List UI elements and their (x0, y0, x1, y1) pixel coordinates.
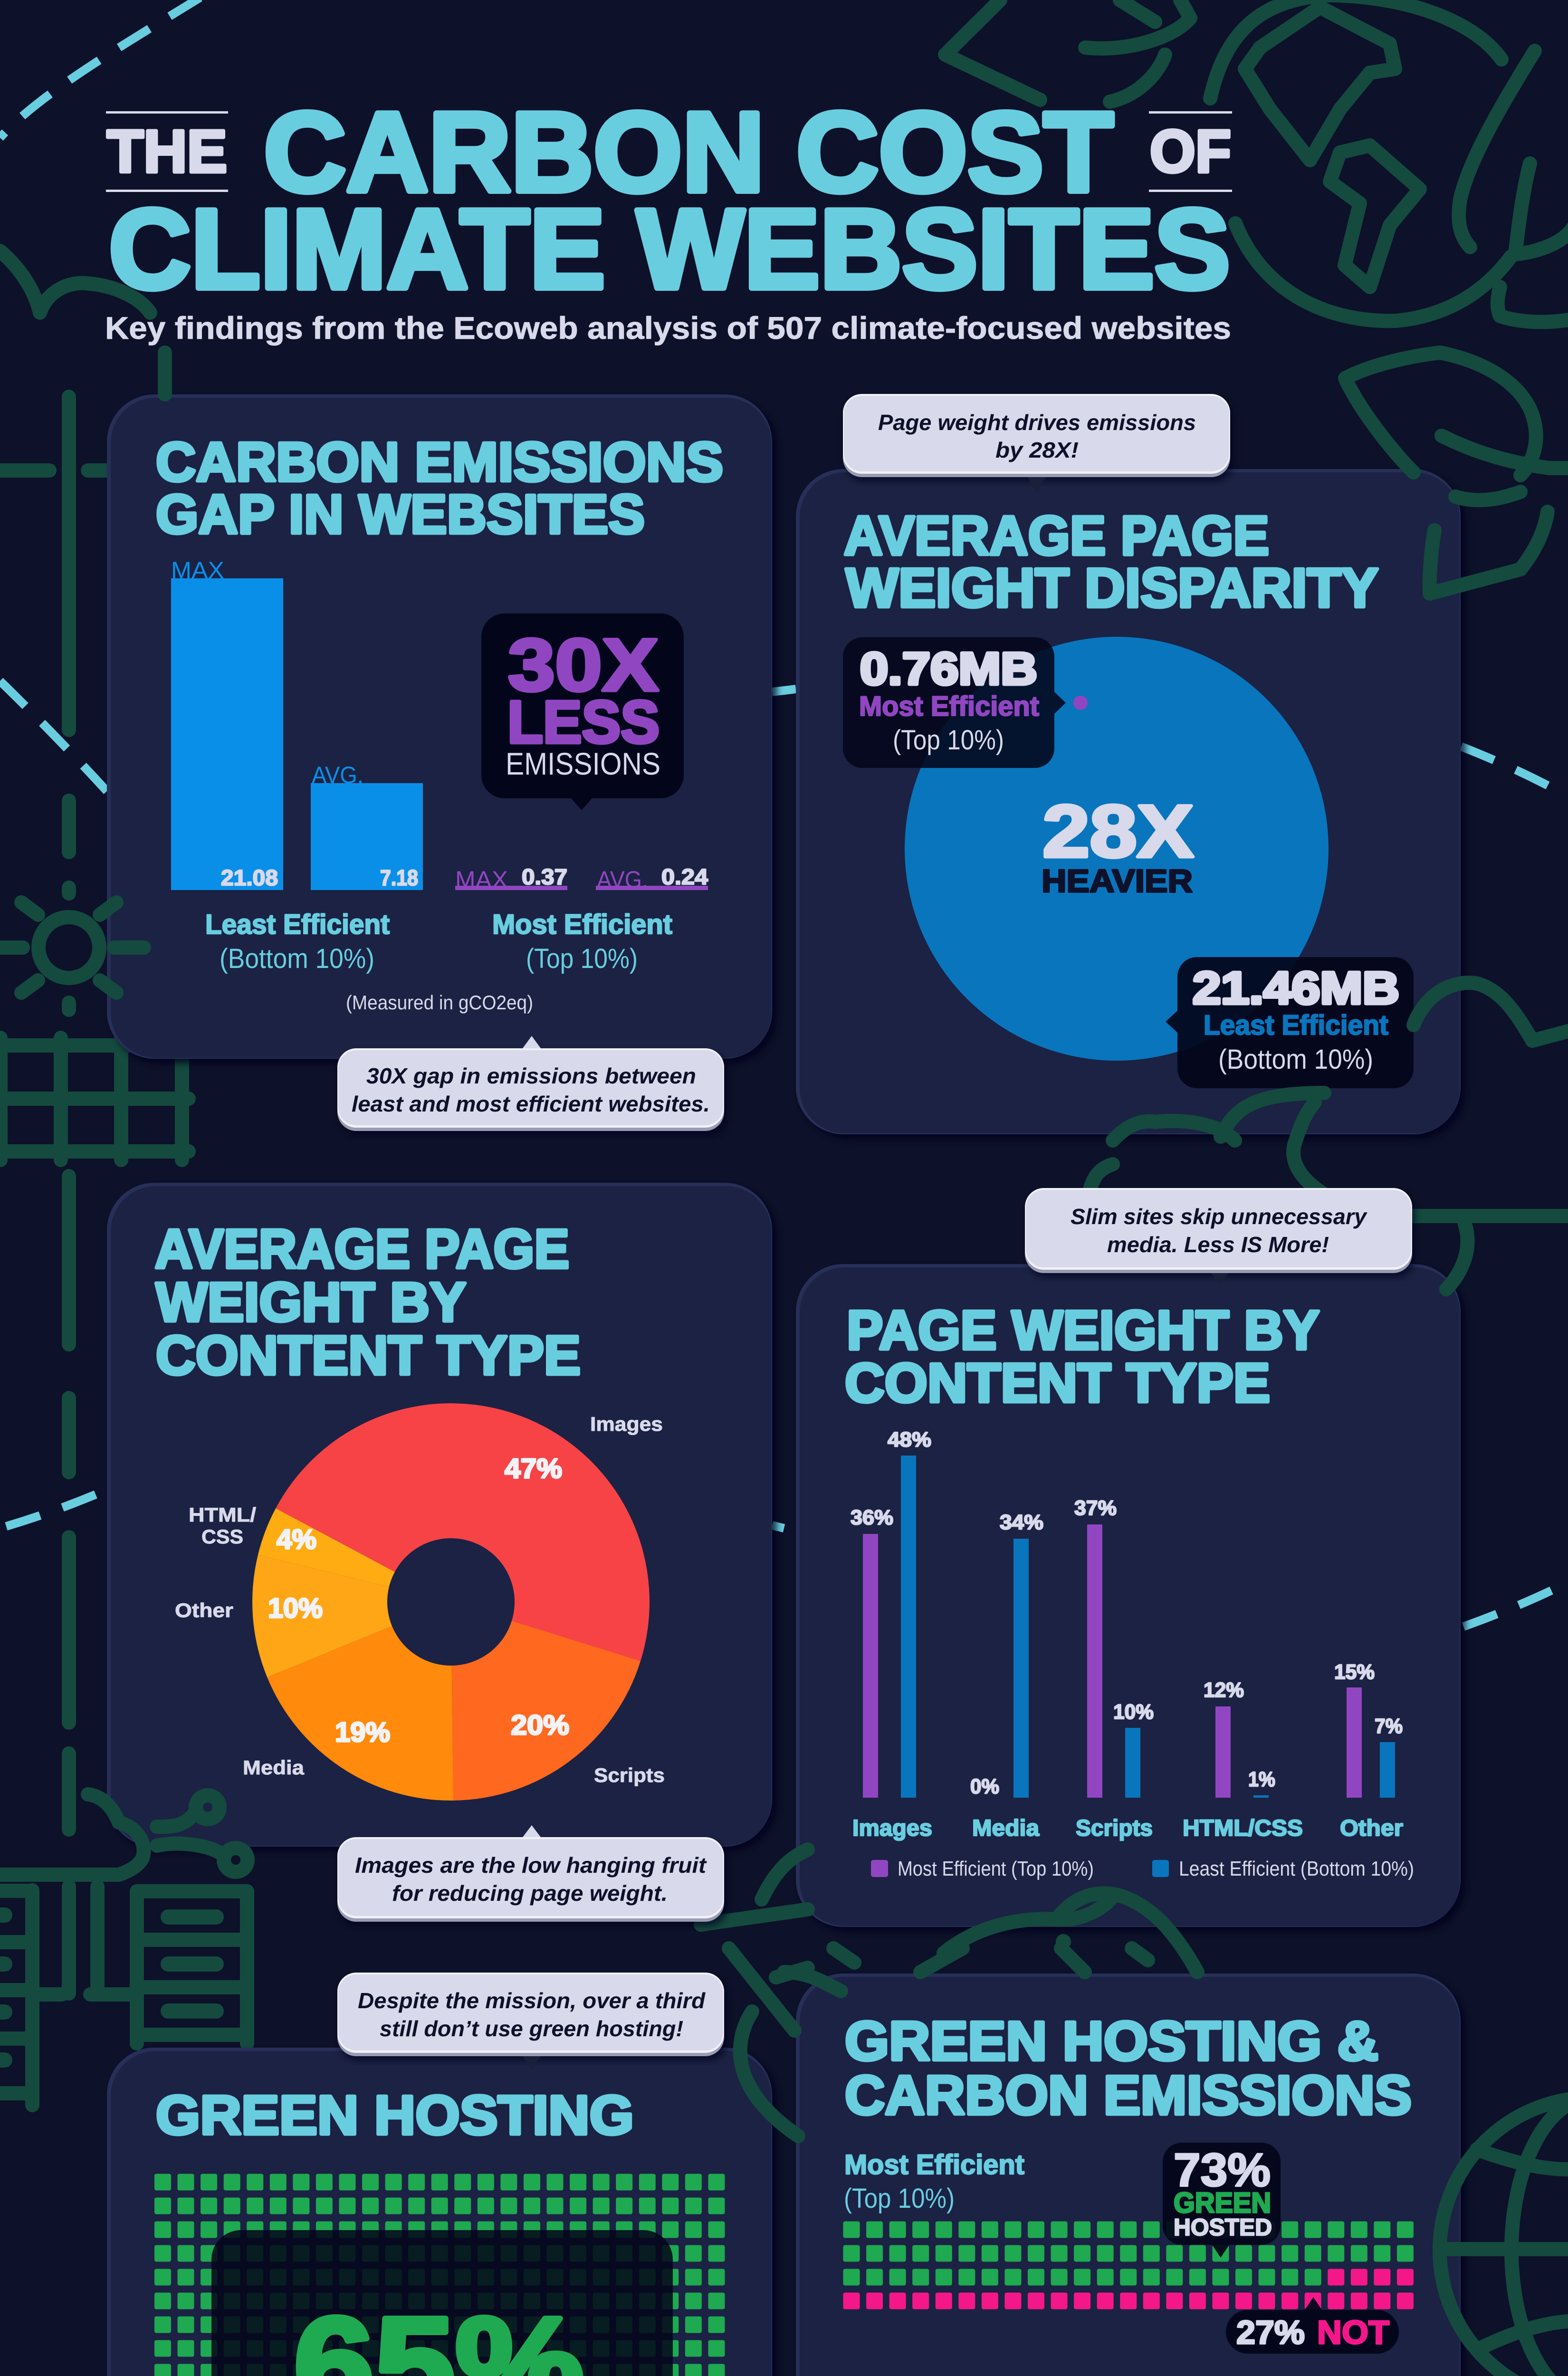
donut chart: 4% (277, 1524, 316, 1555)
callout: despite the mission: Despite the mission, over a third (358, 1988, 706, 2013)
heading (845, 1299, 1319, 1414)
tooltip: 0.76MB: (Top 10%) (893, 725, 1004, 756)
heading (845, 2010, 1412, 2126)
callout: page weight drives emissions (843, 394, 1233, 493)
waffle chart: most efficient (843, 2221, 1420, 2316)
callout: 30X less emissions: 30X (508, 624, 659, 707)
heading: AVERAGE PAGE (844, 505, 1269, 566)
grouped bar chart: 1% (1248, 1768, 1275, 1791)
chart legend (871, 1857, 1414, 1880)
axis labels: Most Efficient (492, 909, 672, 940)
bar chart: least efficient: AVG. (312, 762, 363, 788)
group label: most efficient: Most Efficient (844, 2149, 1024, 2180)
tooltip: 27 percent not: 27% (1236, 2314, 1305, 2351)
callout: images are the low hanging fruit: Images are the low hanging fruit (355, 1853, 707, 1878)
grouped bar chart: 36% (851, 1506, 893, 1529)
grouped bar chart: Scripts (1076, 1816, 1153, 1841)
callout: images are the low hanging fruit (337, 1825, 727, 1926)
tooltip: 21.46MB (1166, 957, 1414, 1088)
tooltip: 27 percent not: NOT (1317, 2314, 1389, 2351)
overlay: 65 percent statistic (211, 2230, 673, 2376)
donut chart: Images (590, 1413, 663, 1435)
heading: CONTENT TYPE (845, 1352, 1270, 1414)
title: OF (1150, 118, 1231, 185)
chart legend: Most Efficient (Top 10%) (898, 1857, 1094, 1880)
grouped bar chart: 34% (1000, 1511, 1043, 1534)
callout: despite the mission (337, 1973, 727, 2070)
dot: most efficient weight (1073, 696, 1088, 710)
grouped bar chart: 0% (970, 1775, 999, 1798)
title: THE (107, 118, 227, 185)
callout: slim sites: Slim sites skip unnecessary (1071, 1204, 1367, 1229)
callout: slim sites (1025, 1188, 1415, 1284)
tooltip: 73 percent green hosted: GREEN (1174, 2187, 1271, 2219)
heading: WEIGHT BY (156, 1271, 466, 1333)
grouped bar chart: 7% (1375, 1715, 1403, 1738)
axis labels (205, 909, 672, 1014)
heading (844, 505, 1378, 619)
callout: page weight drives emissions: Page weight drives emissions (878, 410, 1196, 435)
callout: slim sites: media. Less IS More! (1107, 1232, 1329, 1257)
donut chart: 47% (505, 1453, 562, 1484)
waffle chart: 507 organizations (154, 2174, 731, 2376)
title: CARBON COST (264, 89, 1113, 215)
tooltip: 21.46MB: Least Efficient (1204, 1010, 1388, 1041)
callout: 30X gap: 30X gap in emissions between (366, 1063, 696, 1088)
donut chart: Media (243, 1756, 305, 1779)
callout: 30X less emissions: EMISSIONS (506, 746, 660, 781)
panel: average page weight by content type (107, 1183, 777, 1851)
axis labels: Least Efficient (205, 909, 390, 940)
heading: CARBON EMISSIONS (156, 431, 723, 493)
bar chart: least efficient: 7.18 (380, 865, 418, 890)
grouped bar chart: 10% (1113, 1700, 1154, 1724)
subtitle: Key findings from the Ecoweb analysis of 507 climate-focused websites (105, 310, 1231, 345)
tooltip: 21.46MB: (Bottom 10%) (1218, 1044, 1373, 1075)
bar chart: most efficient: MAX (455, 866, 508, 893)
donut chart: Other (175, 1599, 233, 1621)
chart legend: Least Efficient (Bottom 10%) (1179, 1857, 1414, 1880)
callout: despite the mission: still don’t use green hosting! (380, 2016, 683, 2041)
tooltip: 0.76MB: 0.76MB (860, 643, 1037, 694)
callout: 30X less emissions (481, 613, 684, 810)
bar chart: most efficient: AVG. (597, 866, 648, 893)
tooltip: 73 percent green hosted (1163, 2143, 1281, 2258)
tooltip: 73 percent green hosted: HOSTED (1174, 2214, 1272, 2241)
title: CLIMATE WEBSITES (109, 186, 1230, 312)
panel: green hosting and carbon emissions (796, 1974, 1465, 2376)
tooltip: 27 percent not (1226, 2297, 1399, 2354)
bar chart: least efficient (171, 557, 423, 890)
heading: CARBON EMISSIONS (845, 2064, 1412, 2126)
panel: carbon emissions gap (107, 394, 777, 1063)
heading: GREEN HOSTING (156, 2084, 634, 2146)
circle label: 28X heavier: HEAVIER (1042, 863, 1193, 899)
donut chart: HTML/ (189, 1504, 256, 1526)
grouped bar chart: HTML/CSS (1183, 1816, 1303, 1841)
panel: green hosting (107, 2048, 777, 2376)
donut chart: Scripts (594, 1764, 665, 1786)
tooltip: 21.46MB: 21.46MB (1193, 963, 1399, 1014)
callout: 30X gap: least and most efficient websites. (352, 1092, 710, 1116)
donut chart (175, 1403, 665, 1801)
grouped bar chart: 15% (1334, 1660, 1375, 1684)
heading: GREEN HOSTING & (845, 2010, 1378, 2072)
heading (155, 1218, 581, 1386)
circle: least efficient weight (905, 637, 1329, 1061)
grouped bar chart: Other (1340, 1816, 1403, 1841)
bar chart: most efficient: 0.24 (661, 864, 708, 889)
donut chart: 10% (268, 1593, 323, 1624)
donut chart: CSS (201, 1525, 243, 1548)
heading: WEIGHT DISPARITY (846, 557, 1378, 619)
axis labels: (Top 10%) (526, 943, 638, 974)
grouped bar chart: 48% (888, 1428, 931, 1451)
heading (156, 431, 723, 545)
callout: 30X gap (337, 1036, 727, 1136)
tooltip: 73 percent green hosted: 73% (1174, 2144, 1271, 2196)
circle label: 28X heavier (1042, 790, 1194, 899)
axis labels: (Measured in gCO2eq) (346, 991, 533, 1014)
bar chart: least efficient: 21.08 (221, 865, 278, 890)
bar chart: most efficient (455, 864, 708, 893)
tooltip: 0.76MB: Most Efficient (859, 691, 1039, 722)
grouped bar chart (851, 1428, 1403, 1841)
heading: GAP IN WEBSITES (156, 483, 645, 545)
grouped bar chart: Media (972, 1816, 1039, 1841)
heading: CONTENT TYPE (156, 1324, 581, 1386)
bar chart: most efficient: 0.37 (522, 864, 567, 889)
axis labels: (Bottom 10%) (220, 943, 374, 974)
grouped bar chart: 37% (1074, 1496, 1117, 1520)
donut chart: 19% (335, 1717, 390, 1748)
bar chart: least efficient: MAX (171, 557, 224, 584)
panel: average page weight disparity (796, 469, 1465, 1139)
tooltip: 0.76MB (843, 637, 1066, 768)
title (106, 89, 1232, 312)
donut chart: 20% (511, 1710, 569, 1741)
group label: most efficient: (Top 10%) (844, 2183, 955, 2214)
grouped bar chart: Images (852, 1816, 932, 1841)
callout: page weight drives emissions: by 28X! (995, 438, 1079, 462)
group label: most efficient (844, 2149, 1024, 2214)
circle label: 28X heavier: 28X (1042, 790, 1194, 873)
callout: images are the low hanging fruit: for reducing page weight. (392, 1881, 668, 1906)
heading: PAGE WEIGHT BY (847, 1299, 1319, 1361)
callout: 30X less emissions: LESS (507, 689, 660, 756)
panel: page weight by content type (796, 1264, 1465, 1932)
grouped bar chart: 12% (1204, 1678, 1244, 1702)
heading: AVERAGE PAGE (155, 1218, 569, 1280)
